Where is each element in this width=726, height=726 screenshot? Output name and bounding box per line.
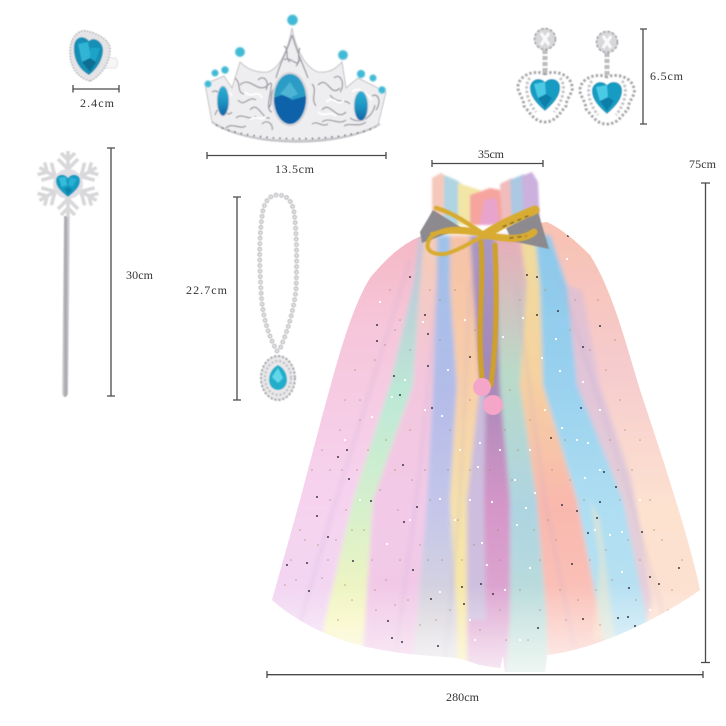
left earring frame <box>518 72 572 122</box>
necklace beads <box>260 195 297 351</box>
ring frame <box>70 31 110 81</box>
right earring frame <box>580 76 634 124</box>
tiara <box>205 15 386 142</box>
cape gold ribbon bow <box>428 208 535 385</box>
cape dark sequins <box>287 236 694 646</box>
cape tulle pleats <box>433 330 650 566</box>
dimension: wand length: 30cm <box>126 268 154 282</box>
dimension: necklace length: 22.7cm <box>186 283 228 297</box>
dimension: earring height: 6.5cm <box>650 69 684 83</box>
right earring stud <box>596 32 618 52</box>
dimension: wand length <box>107 148 154 396</box>
left earring gem <box>530 79 560 111</box>
dimension: cape length <box>689 157 717 662</box>
tiara top stones <box>205 15 386 94</box>
tiara silver body <box>205 28 386 140</box>
ring band <box>102 58 118 68</box>
dimension: tiara width <box>207 152 386 176</box>
tiara side gems <box>217 86 368 121</box>
cape rainbow fabric <box>272 222 700 672</box>
wand gem <box>56 175 80 197</box>
wand snowflake <box>34 151 102 217</box>
dimension: earring height <box>640 29 684 124</box>
ring <box>70 31 118 81</box>
necklace pendant <box>261 356 295 400</box>
dimension: collar width: 35cm <box>478 147 505 161</box>
necklace gem <box>269 365 287 390</box>
dimension: cape length: 75cm <box>689 157 717 171</box>
dimension: collar width <box>432 147 543 167</box>
cape gold sequins <box>285 290 682 640</box>
wand stick <box>62 216 70 397</box>
cape pink pom-poms <box>473 378 503 415</box>
cape ribbon tails <box>480 242 482 378</box>
left earring <box>518 28 572 122</box>
tiara centre gem <box>272 72 308 126</box>
necklace <box>260 195 297 400</box>
dimension: cape sweep width: 280cm <box>446 690 480 704</box>
dimension: ring width: 2.4cm <box>80 96 115 110</box>
ring gem <box>74 37 103 75</box>
right earring <box>580 32 634 124</box>
dimension: cape sweep width <box>267 671 703 704</box>
cape hem fade <box>288 596 672 672</box>
dimension: necklace length <box>186 197 241 400</box>
dimension: tiara width: 13.5cm <box>275 162 315 176</box>
rainbow cape <box>272 171 700 672</box>
tiara rim <box>212 122 380 142</box>
tiara filigree <box>212 35 379 130</box>
cape white sequins <box>345 259 650 640</box>
dimension: ring width <box>73 85 119 110</box>
cape bow sequin wings <box>420 210 549 249</box>
right earring gem <box>592 82 622 114</box>
cape neck ruffle <box>432 172 540 225</box>
left earring stud <box>534 28 556 50</box>
wand <box>34 151 102 397</box>
